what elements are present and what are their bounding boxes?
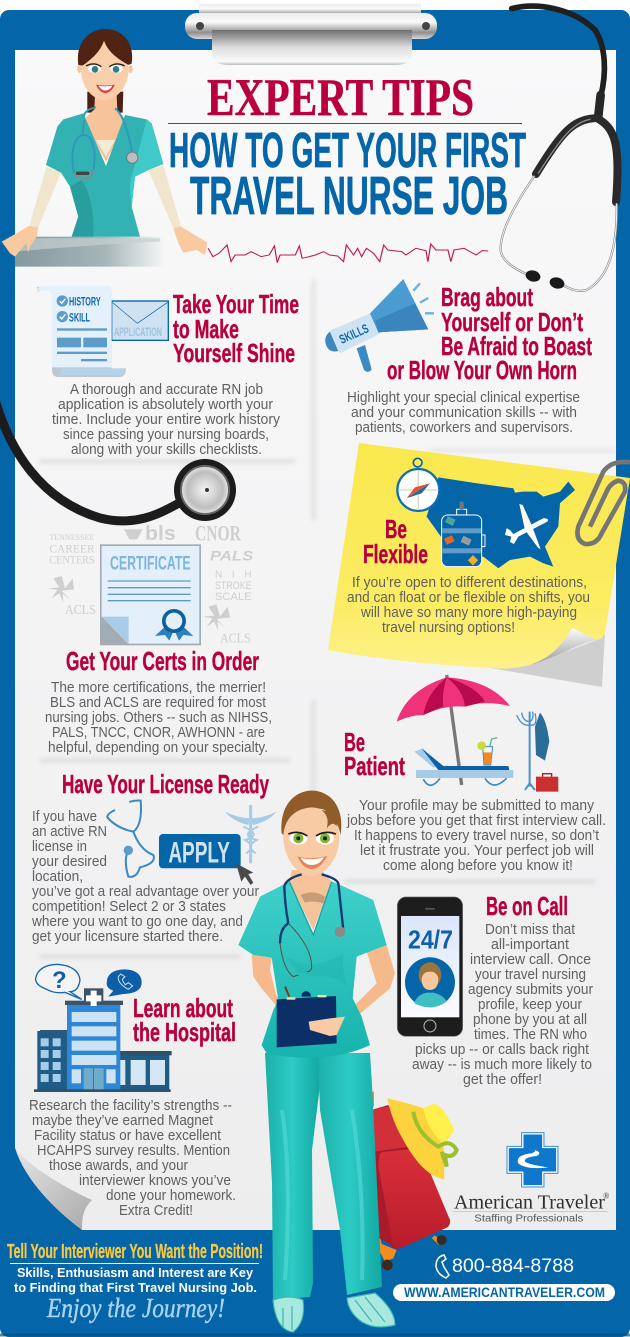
icon: certificate with certification logos: CNOR bbox=[195, 521, 241, 546]
body text: profile, keep your bbox=[478, 996, 582, 1013]
body text: BLS and ACLS are required for most bbox=[50, 694, 267, 711]
body text: patients, coworkers and supervisors. bbox=[355, 419, 573, 436]
logo: american traveler bbox=[453, 1133, 609, 1225]
body text: Research the facility’s strengths -- bbox=[29, 1097, 232, 1114]
heading bbox=[363, 514, 428, 569]
body text: HCAHPS survey results. Mention bbox=[37, 1142, 230, 1159]
icon: megaphone bbox=[325, 279, 434, 372]
body text: and your communication skills -- with bbox=[351, 404, 577, 421]
icon: certificate with certification logos: PALS bbox=[210, 548, 254, 564]
body text: let it frustrate you. Your perfect job will bbox=[360, 842, 594, 859]
body text: times. The RN who bbox=[474, 1026, 587, 1043]
panel: be on call bbox=[397, 891, 593, 1088]
icon: megaphone: SKILLS bbox=[337, 321, 371, 347]
icon: certificate with certification logos: SCALE bbox=[215, 591, 252, 603]
heading: Flexible bbox=[363, 539, 428, 569]
body text: travel nursing options! bbox=[382, 619, 515, 636]
icon: certificate with certification logos: TENNESSEE bbox=[49, 533, 94, 542]
body text: get the offer! bbox=[463, 1071, 542, 1088]
icon: certificate with certification logos: bls bbox=[145, 522, 176, 545]
body text: your travel nursing bbox=[475, 966, 586, 983]
body text: done your homework. bbox=[106, 1187, 236, 1204]
heading: Be bbox=[385, 514, 407, 544]
panel: be patient bbox=[344, 675, 606, 874]
body text: those awards, and your bbox=[49, 1157, 188, 1174]
body text: get your licensure started there. bbox=[32, 928, 223, 945]
body text bbox=[52, 381, 280, 458]
icon: stethoscope, apply button, caduceus bbox=[107, 800, 277, 885]
icon: hospital building with speech bubbles: ? bbox=[52, 967, 67, 994]
icon: application scroll and envelope: APPLICATION bbox=[114, 325, 162, 339]
illustration: us map, compass and suitcase bbox=[397, 458, 575, 568]
heading: Be bbox=[344, 727, 365, 757]
body text: and can float or be flexible on shifts, you bbox=[347, 589, 590, 606]
heading bbox=[173, 289, 299, 368]
panel: have your license ready bbox=[31, 769, 277, 945]
icon: certificate with certification logos bbox=[48, 521, 254, 646]
body text: where you want to go one day, and bbox=[31, 913, 243, 930]
icon: paper clip bbox=[577, 462, 630, 544]
closing message: Skills, Enthusiasm and Interest are Key bbox=[17, 1265, 254, 1280]
body text: Highlight your special clinical expertise bbox=[347, 389, 580, 406]
title divider bbox=[168, 123, 522, 124]
heading: Patient bbox=[344, 751, 405, 781]
body text: If you have bbox=[32, 808, 97, 825]
heading bbox=[344, 727, 405, 781]
icon: application scroll and envelope bbox=[37, 286, 168, 377]
heading: the Hospital bbox=[133, 1017, 236, 1047]
body text: time. Include your entire work history bbox=[52, 411, 280, 428]
shoes bbox=[273, 1293, 395, 1332]
scrub top and arms bbox=[238, 870, 395, 1058]
illustration: red suitcase with yellow hat bbox=[372, 1092, 457, 1270]
body text: It happens to every travel nurse, so don’t bbox=[354, 827, 600, 844]
body text: jobs before you get that first interview call. bbox=[346, 812, 606, 829]
panel: learn about the hospital bbox=[29, 964, 236, 1219]
heading: Get Your Certs in Order bbox=[66, 646, 259, 676]
body text: license in bbox=[32, 838, 87, 855]
body text bbox=[347, 574, 590, 636]
body text bbox=[347, 389, 580, 436]
icon: black stethoscope tube and chest piece bbox=[0, 400, 236, 521]
heading bbox=[133, 993, 236, 1047]
ecg heartbeat line bbox=[208, 244, 488, 263]
body text: along with your skills checklists. bbox=[71, 441, 262, 458]
heading: Yourself Shine bbox=[173, 338, 295, 368]
closing message: Tell Your Interviewer You Want the Position! bbox=[7, 1241, 263, 1263]
icon: hospital building with speech bubbles bbox=[34, 964, 172, 1092]
body text: Your profile may be submitted to many bbox=[359, 797, 594, 814]
body text bbox=[31, 808, 259, 945]
heading: Brag about bbox=[441, 282, 533, 312]
closing message: to Finding that First Travel Nursing Job. bbox=[14, 1280, 257, 1295]
body text: phone by you at all bbox=[473, 1011, 587, 1028]
panel: be flexible sticky note bbox=[328, 443, 630, 687]
logo: american traveler: American Traveler bbox=[454, 1191, 605, 1213]
body text: Don’t miss that bbox=[485, 921, 576, 938]
icon: application scroll and envelope: SKILL bbox=[69, 310, 90, 324]
body text: The more certifications, the merrier! bbox=[51, 679, 266, 696]
icon: smartphone 24/7: 24/7 bbox=[408, 924, 453, 954]
body text: location, bbox=[32, 868, 83, 885]
icon: certificate with certification logos: ACLS bbox=[220, 631, 251, 646]
logo: american traveler: ® bbox=[603, 1191, 609, 1200]
body text: maybe they’ve earned Magnet bbox=[32, 1112, 214, 1129]
body text: an active RN bbox=[32, 823, 107, 840]
heading bbox=[387, 282, 592, 385]
body text bbox=[412, 921, 593, 1088]
body text: competition! Select 2 or 3 states bbox=[32, 898, 226, 915]
icon: stethoscope ear tips bbox=[524, 269, 566, 290]
body text: your desired bbox=[32, 853, 107, 870]
body text: interview call. Once bbox=[470, 951, 591, 968]
contact details bbox=[393, 1255, 615, 1301]
closing message: Enjoy the Journey! bbox=[46, 1293, 225, 1323]
closing message bbox=[7, 1241, 263, 1323]
heading: to Make bbox=[173, 314, 239, 344]
icon: stethoscope, apply button, caduceus: APPLY bbox=[168, 837, 230, 870]
body text: If you’re open to different destinations, bbox=[352, 574, 587, 591]
body text: picks up -- or calls back right bbox=[415, 1041, 590, 1058]
body text: helpful, depending on your specialty. bbox=[48, 739, 268, 756]
body text: come along before you know it! bbox=[383, 857, 573, 874]
title: expert tips: EXPERT TIPS bbox=[207, 69, 474, 127]
illustration: black stethoscope top right bbox=[501, 6, 618, 291]
heading: Have Your License Ready bbox=[62, 769, 269, 799]
body text: A thorough and accurate RN job bbox=[70, 381, 263, 398]
body text: PALS, TNCC, CNOR, AWHONN - are bbox=[52, 724, 265, 741]
illustration: beach umbrella, lounger, coat rack, briefcase bbox=[397, 675, 558, 792]
body text bbox=[29, 1097, 236, 1219]
body text: since passing your nursing boards, bbox=[63, 426, 269, 443]
body text: all-important bbox=[491, 936, 570, 953]
body text: Extra Credit! bbox=[119, 1202, 193, 1219]
body text: Facility status or have excellent bbox=[34, 1127, 222, 1144]
heading: Learn about bbox=[133, 993, 233, 1023]
body text: nursing jobs. Others -- such as NIHSS, bbox=[45, 709, 272, 726]
panel: get your certs in order bbox=[45, 521, 272, 756]
panel: take your time bbox=[37, 286, 299, 458]
illustration: nurse at desk bbox=[2, 29, 207, 267]
clipboard metal clip bbox=[185, 4, 437, 65]
head bbox=[281, 791, 341, 876]
icon: certificate with certification logos: CENTERS bbox=[49, 552, 95, 566]
body text bbox=[45, 679, 272, 756]
icon: certificate with certification logos: STROKE bbox=[215, 580, 252, 592]
panel: brag about yourself bbox=[325, 279, 592, 436]
heading: Take Your Time bbox=[173, 289, 299, 319]
icon: certificate with certification logos: CERTIFICATE bbox=[110, 553, 191, 574]
icon: certificate with certification logos: NIH bbox=[215, 570, 252, 581]
icon: certificate with certification logos: CAREER bbox=[49, 541, 95, 555]
heading: Be on Call bbox=[486, 891, 568, 921]
icon: smartphone 24/7 bbox=[397, 897, 463, 1036]
contact details: 800-884-8788 bbox=[452, 1256, 574, 1277]
logo: american traveler: Staffing Professionals bbox=[474, 1214, 583, 1225]
body text: agency submits your bbox=[468, 981, 593, 998]
body text: you’ve got a real advantage over your bbox=[32, 883, 259, 900]
body text: application is absolutely worth your bbox=[58, 396, 273, 413]
illustration: large nurse with clipboard bbox=[238, 791, 395, 1332]
body text: interviewer knows you’ve bbox=[79, 1172, 231, 1189]
body text: will have so many more high-paying bbox=[360, 604, 577, 621]
trousers bbox=[265, 1053, 382, 1300]
icon: certificate with certification logos: ACLS bbox=[65, 602, 96, 617]
body text bbox=[346, 797, 606, 874]
icon: application scroll and envelope: HISTORY bbox=[69, 295, 101, 309]
body text: away -- is much more likely to bbox=[412, 1056, 592, 1073]
contact details: WWW.AMERICANTRAVELER.COM bbox=[404, 1284, 605, 1300]
